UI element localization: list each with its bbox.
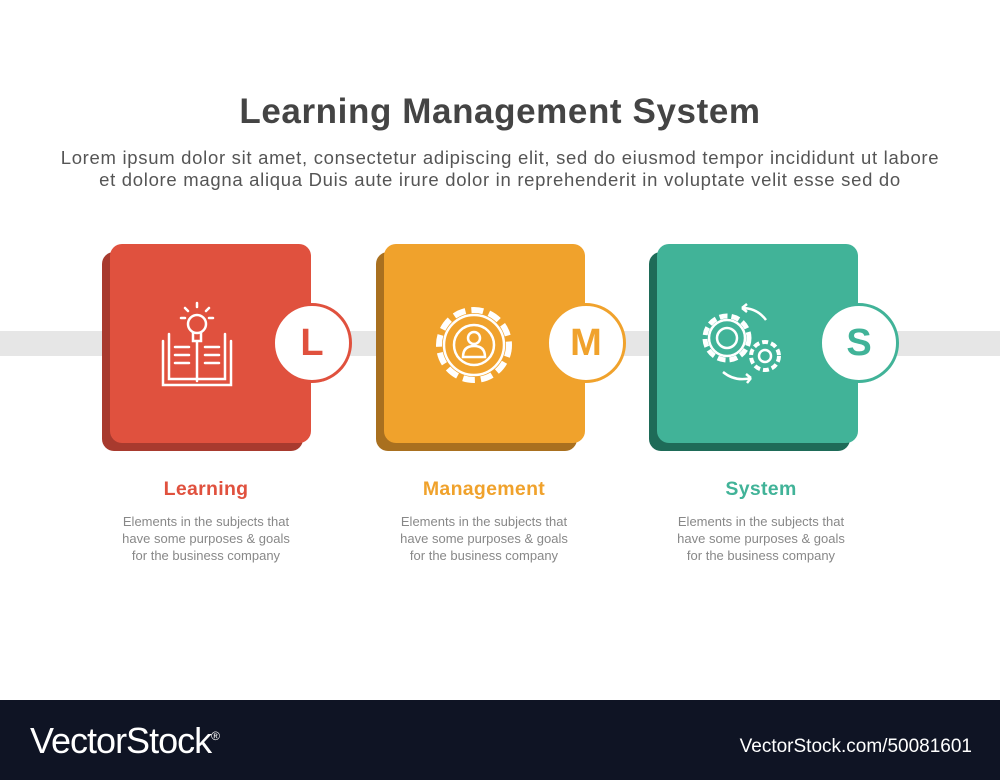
badge M: [546, 303, 626, 383]
desc: system: [677, 514, 845, 563]
desc: management: [400, 514, 568, 563]
badge M: M: [570, 322, 602, 364]
label: learning: Learning: [164, 478, 248, 500]
label: system: System: [725, 478, 797, 500]
desc: system: Elements in the subjects that: [678, 514, 844, 529]
card: learning: [102, 244, 352, 451]
footer id: VectorStock.com/50081601: [740, 736, 972, 757]
desc: learning: for the business company: [132, 548, 280, 563]
badge S: [819, 303, 899, 383]
card: management: [376, 244, 626, 451]
desc: management: for the business company: [410, 548, 558, 563]
desc: learning: [122, 514, 290, 563]
desc: management: have some purposes & goals: [400, 531, 568, 546]
title: Learning Management System: [239, 92, 761, 131]
badge S: S: [846, 322, 872, 364]
footer logo: VectorStock®: [30, 720, 219, 761]
footer: [0, 700, 1000, 780]
icon: gears: [702, 303, 781, 384]
badge L: [272, 303, 352, 383]
desc: learning: Elements in the subjects that: [123, 514, 289, 529]
icon: gear person: [436, 307, 512, 383]
label: management: Management: [423, 478, 545, 500]
badge L: L: [300, 322, 324, 364]
desc: learning: have some purposes & goals: [122, 531, 290, 546]
connector band: [0, 331, 1000, 356]
desc: system: for the business company: [687, 548, 835, 563]
card: system: [649, 244, 899, 451]
desc: system: have some purposes & goals: [677, 531, 845, 546]
desc: management: Elements in the subjects that: [401, 514, 567, 529]
icon: book with bulb: [162, 302, 232, 386]
subtitle: Lorem ipsum dolor sit amet, consectetur adipiscing elit, sed do eiusmod tempor incididunt ut labore: [61, 147, 939, 168]
subtitle: et dolore magna aliqua Duis aute irure dolor in reprehenderit in voluptate velit esse sed do: [99, 169, 901, 190]
subtitle: [61, 147, 939, 190]
